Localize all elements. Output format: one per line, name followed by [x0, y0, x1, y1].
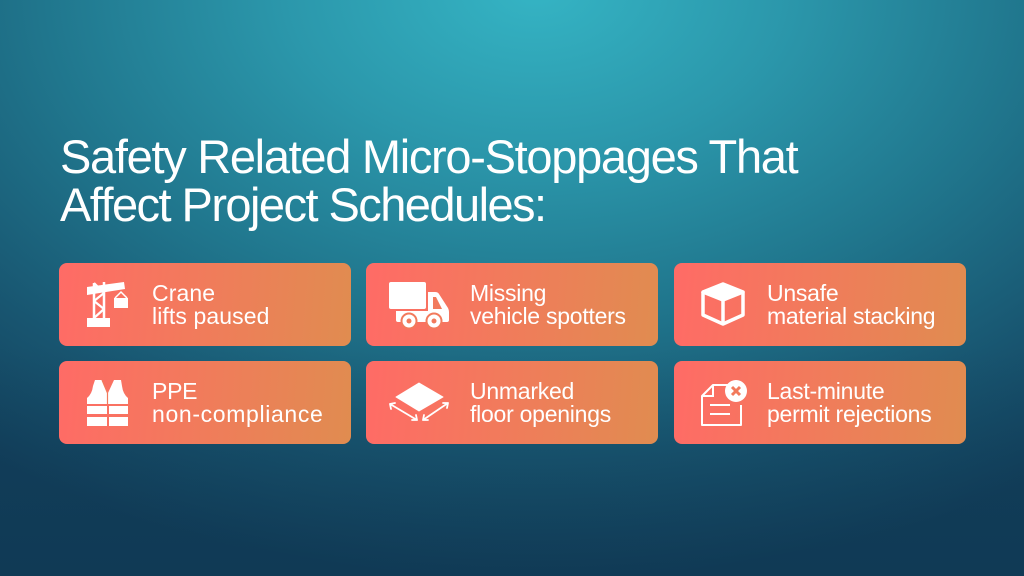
label: non-compliance	[152, 401, 323, 427]
label	[767, 280, 935, 329]
card: unmarked floor openings	[366, 361, 658, 444]
label: Missing	[470, 280, 546, 306]
label	[152, 378, 323, 427]
title: Affect Project Schedules:	[60, 178, 546, 231]
card: missing vehicle spotters	[366, 263, 658, 346]
card: last-minute permit rejections	[674, 361, 966, 444]
label	[470, 280, 626, 329]
label: vehicle spotters	[470, 303, 626, 329]
title	[60, 130, 798, 231]
label: PPE	[152, 378, 197, 404]
label	[767, 378, 931, 427]
icon: floor opening	[389, 382, 449, 421]
label: floor openings	[470, 401, 611, 427]
label	[470, 378, 611, 427]
card: PPE non-compliance	[59, 361, 351, 444]
icon: truck	[389, 282, 449, 330]
label: permit rejections	[767, 401, 931, 427]
label: lifts paused	[152, 303, 270, 329]
label: Last-minute	[767, 378, 884, 404]
label: Unsafe	[767, 280, 838, 306]
icon: rejected permit	[701, 380, 747, 426]
label: Crane	[152, 280, 215, 306]
card: crane lifts paused	[59, 263, 351, 346]
card: unsafe material stacking	[674, 263, 966, 346]
label: Unmarked	[470, 378, 574, 404]
title: Safety Related Micro-Stoppages That	[60, 130, 797, 183]
label: material stacking	[767, 303, 935, 329]
label	[152, 280, 270, 329]
icon: safety vest	[87, 380, 128, 426]
icon: crane	[87, 282, 128, 327]
icon: box	[701, 282, 745, 326]
